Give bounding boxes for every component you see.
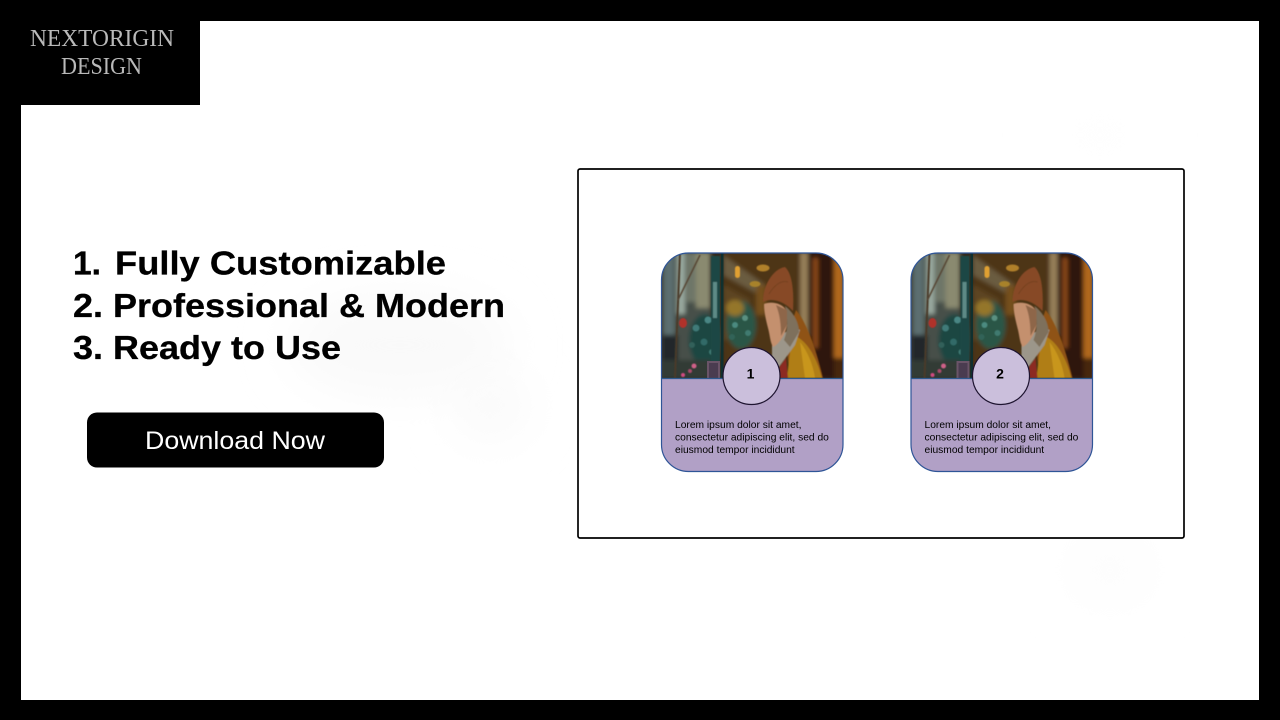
card 1 text: Lorem ipsum dolor sit amet, xyxy=(675,420,801,431)
card 1 text: eiusmod tempor incididunt xyxy=(675,445,795,456)
card 2 number badge: 2 xyxy=(996,366,1004,382)
logo block xyxy=(0,0,200,105)
card 2 text: Lorem ipsum dolor sit amet, xyxy=(924,420,1051,431)
feature list heading: 1. xyxy=(73,244,101,282)
logo text: NEXTORIGIN xyxy=(30,26,174,52)
feature list heading: Fully Customizable xyxy=(115,244,446,282)
card 2 number badge xyxy=(972,348,1030,404)
card 1 number badge: 1 xyxy=(747,366,755,382)
card 2 text: consectetur adipiscing elit, sed do xyxy=(924,432,1079,444)
card 1 number badge xyxy=(723,348,780,404)
card 2 xyxy=(910,252,1094,472)
card 2 photo xyxy=(910,252,1094,380)
download button: Download Now xyxy=(145,427,326,455)
preview panel xyxy=(578,169,1184,538)
card 1 text: consectetur adipiscing elit, sed do xyxy=(675,432,829,444)
feature list heading xyxy=(73,244,505,366)
logo text: DESIGN xyxy=(61,54,142,80)
download button xyxy=(87,412,384,468)
feature list heading: 2. Professional & Modern xyxy=(73,287,505,324)
card 1 photo xyxy=(661,252,844,380)
feature list heading: 3. Ready to Use xyxy=(73,329,341,366)
logo text xyxy=(30,26,174,80)
card 1 xyxy=(661,252,844,472)
card 2 text: eiusmod tempor incididunt xyxy=(924,445,1044,456)
card 2 text xyxy=(924,420,1079,456)
soft background smudges xyxy=(290,105,1160,605)
card 1 text xyxy=(675,420,829,456)
